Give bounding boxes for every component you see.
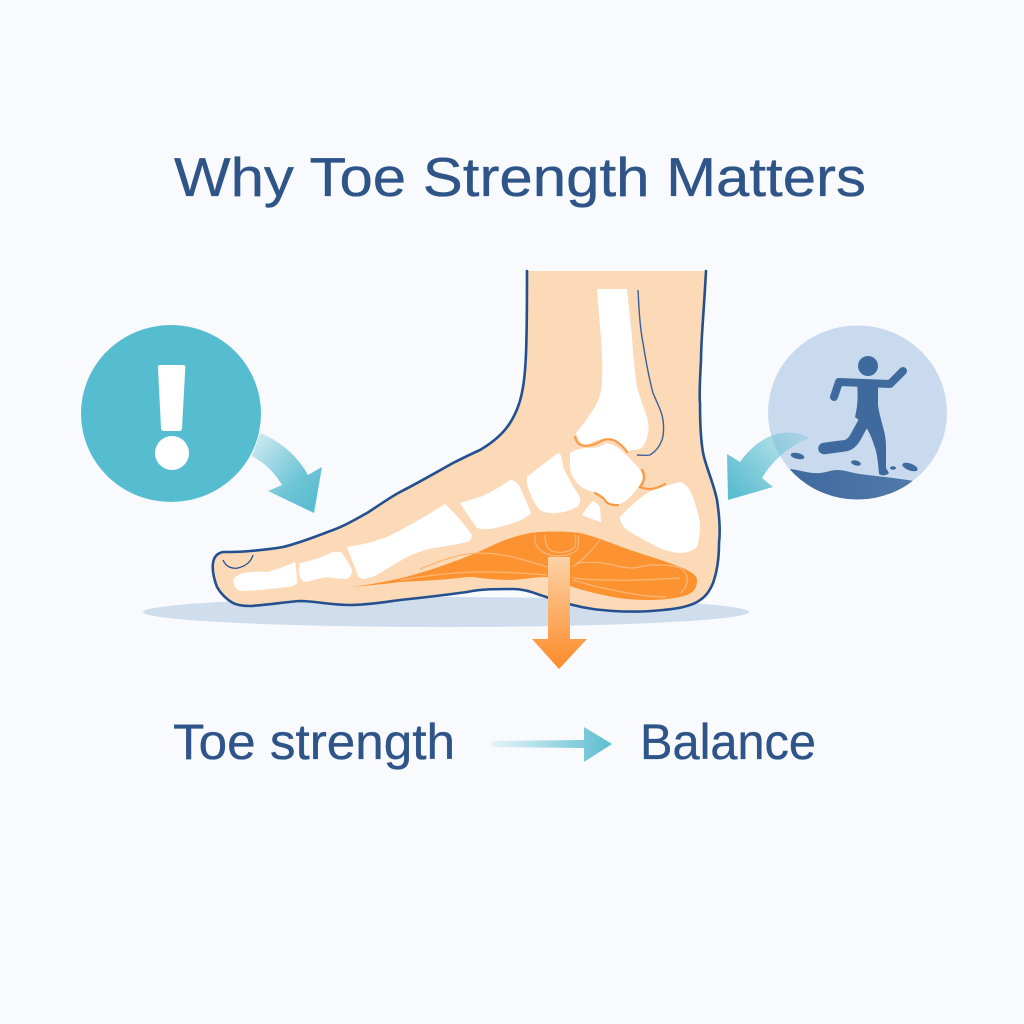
talus — [570, 443, 643, 505]
illustration: foot anatomy — [213, 271, 720, 612]
caption: toe strength: Toe strength — [173, 714, 455, 770]
arrow: downward pressure — [532, 557, 587, 669]
runner figure — [790, 356, 919, 475]
metatarsal — [347, 504, 472, 579]
warning icon — [81, 325, 261, 502]
arrow: warning to foot — [252, 433, 322, 513]
foot outline — [213, 271, 720, 612]
distal phalanx — [233, 562, 297, 591]
ground — [790, 469, 913, 500]
tibia — [576, 289, 648, 451]
runner icon — [768, 326, 947, 510]
caption: balance: Balance — [640, 714, 816, 770]
foot skin — [213, 271, 720, 612]
toenail line — [223, 555, 253, 568]
navicular — [527, 453, 580, 513]
cuneiform — [460, 480, 531, 529]
achilles line — [637, 290, 664, 455]
ground shadow — [143, 597, 749, 627]
arrow: runner to foot — [727, 433, 810, 500]
title: Why Toe Strength Matters — [174, 146, 866, 208]
plantar muscle — [350, 532, 697, 600]
orange joint lines — [575, 437, 665, 505]
small tarsal — [582, 501, 601, 522]
proximal phalanx — [299, 552, 352, 582]
arrow: toe strength to balance — [491, 727, 612, 762]
toe and foot bones — [233, 289, 700, 591]
calcaneus — [620, 482, 700, 553]
